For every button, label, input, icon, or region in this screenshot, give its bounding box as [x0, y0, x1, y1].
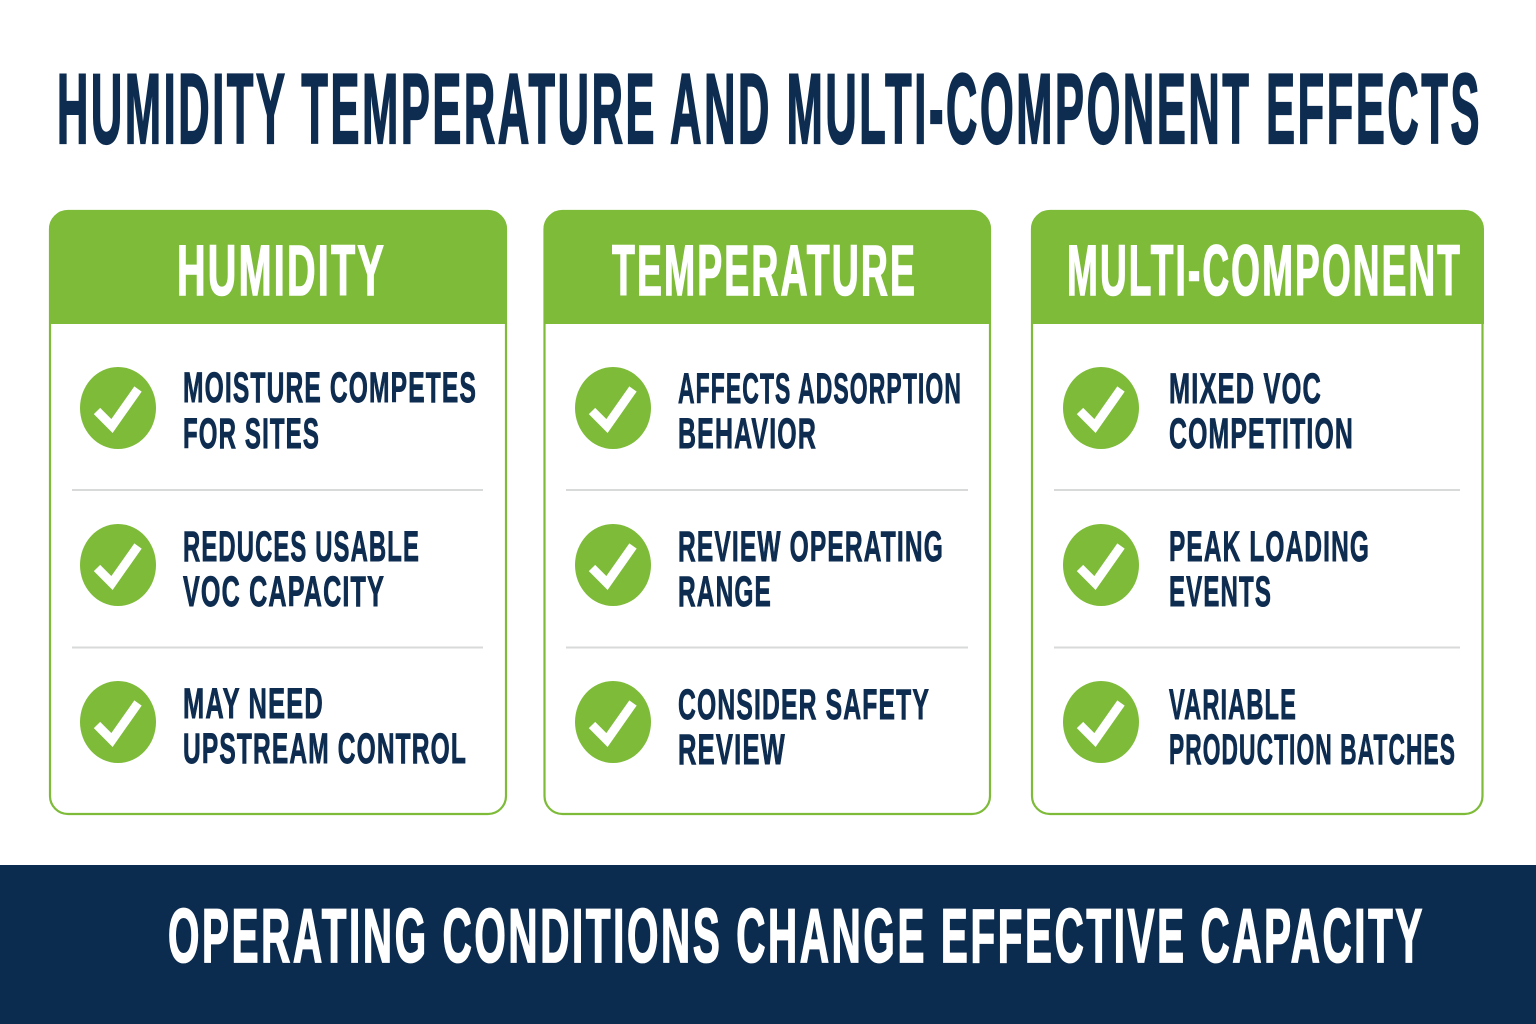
item 3: MAY NEED [183, 681, 324, 728]
panel: multi-component [1031, 211, 1484, 814]
item 1: COMPETITION [1169, 411, 1354, 458]
icon: check 3 [1063, 681, 1139, 763]
header band [544, 211, 991, 324]
item 1 [183, 365, 477, 458]
panel: temperature [544, 211, 991, 814]
item 3: UPSTREAM CONTROL [183, 726, 467, 773]
icon: check 3 [80, 681, 156, 763]
item 2: REDUCES USABLE [183, 524, 420, 571]
item 2: REVIEW OPERATING [678, 524, 944, 571]
item 1: MOISTURE COMPETES [183, 365, 477, 412]
item 1: MIXED VOC [1169, 366, 1322, 413]
item 2 [1169, 524, 1370, 616]
item 3 [1169, 682, 1456, 774]
card outline [544, 211, 990, 814]
icon: check 2 [1063, 524, 1139, 606]
card outline [50, 211, 506, 814]
heading: HUMIDITY [177, 232, 386, 311]
item 2 [678, 524, 944, 616]
item 3: REVIEW [678, 727, 786, 774]
item 2 [183, 524, 420, 616]
item 2: PEAK LOADING [1169, 524, 1370, 571]
item 1: FOR SITES [183, 411, 320, 458]
icon: check 2 [575, 524, 651, 606]
item 2: EVENTS [1169, 569, 1272, 616]
icon: check 1 [80, 367, 156, 449]
item 3 [183, 681, 467, 773]
icon: check 2 [80, 524, 156, 606]
item 3: CONSIDER SAFETY [678, 682, 930, 729]
item 1: BEHAVIOR [678, 411, 817, 458]
item 1: AFFECTS ADSORPTION [678, 366, 962, 413]
icon: check 3 [575, 681, 651, 763]
item 2: RANGE [678, 569, 772, 616]
item 1 [678, 366, 962, 458]
header band [49, 211, 507, 324]
item 1 [1169, 366, 1354, 458]
footer banner [0, 865, 1536, 1024]
header band [1031, 211, 1484, 324]
panel: humidity [49, 211, 507, 814]
item 3 [678, 682, 930, 774]
heading: TEMPERATURE [612, 232, 917, 311]
card outline [1032, 211, 1482, 814]
item 2: VOC CAPACITY [183, 569, 385, 616]
icon: check 1 [575, 367, 651, 449]
item 3: VARIABLE [1169, 682, 1297, 729]
icon: check 1 [1063, 367, 1139, 449]
